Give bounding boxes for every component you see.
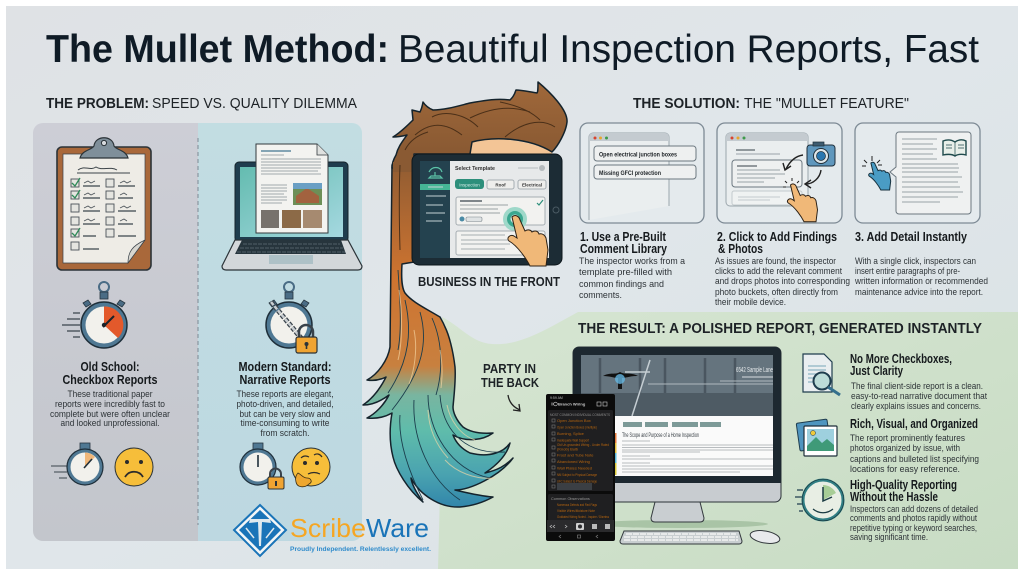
heading: the solution: THE "MULLET FEATURE" bbox=[744, 96, 909, 112]
text block: no more checkboxes: easy-to-read narrative document that bbox=[851, 391, 987, 401]
panel: step 1 card bbox=[580, 123, 704, 223]
text block: no more checkboxes bbox=[850, 352, 987, 411]
text block: modern standard: These reports are elegant, bbox=[236, 389, 334, 399]
logo: ScribeWare bbox=[234, 505, 431, 556]
text block: no more checkboxes: The final client-side report is a clean. bbox=[851, 381, 983, 391]
title bbox=[46, 28, 979, 71]
text block: step 1: template pre-filled with bbox=[579, 267, 672, 277]
illustration: phone checklist: Frost and Tube Note bbox=[557, 452, 594, 458]
text block: old school: Checkbox Reports bbox=[62, 373, 158, 387]
text block: modern standard: photo-driven, and detailed, bbox=[236, 399, 334, 409]
icon: tablet hand bbox=[508, 216, 548, 266]
text block: modern standard: Narrative Reports bbox=[240, 373, 331, 387]
label: party in the back: THE BACK bbox=[481, 376, 539, 390]
text block: high quality: Inspectors can add dozens of detailed bbox=[850, 504, 978, 514]
report header photo: 6542 Sample Lane bbox=[736, 365, 773, 374]
illustration: tablet template selector: Select Template bbox=[455, 166, 495, 172]
icon: camera bbox=[807, 142, 835, 166]
heading: the solution: THE SOLUTION: bbox=[633, 96, 740, 112]
illustration: phone checklist: Open Junction Box bbox=[557, 418, 591, 423]
heading: the problem bbox=[46, 96, 357, 112]
text block: high quality: comments and photos rapidly without bbox=[850, 513, 977, 523]
illustration: tablet template selector: Roof bbox=[495, 182, 506, 188]
illustration: tablet template selector: Electrical bbox=[522, 182, 542, 188]
text block: old school: Old School: bbox=[80, 360, 140, 374]
illustration: phone checklist: NM Subject to Physical Damage bbox=[557, 472, 598, 477]
icon: quick stopwatch bbox=[795, 479, 844, 521]
report heading: The Scope and Purpose of a Home Inspection bbox=[622, 432, 699, 439]
icon: mouse bbox=[749, 528, 781, 546]
text block: step 2: & Photos bbox=[718, 242, 763, 256]
text block: modern standard bbox=[236, 360, 334, 438]
skin forehead bbox=[470, 139, 553, 158]
text block: step 1: 1. Use a Pre-Built bbox=[580, 230, 667, 244]
illustration: phone checklist: Abandoned Wiring bbox=[557, 459, 590, 464]
text block: high quality: High-Quality Reporting bbox=[850, 478, 957, 492]
text block: high quality bbox=[850, 478, 978, 542]
report tabs bbox=[623, 422, 721, 427]
panel: the problem bbox=[33, 123, 362, 541]
top hair bbox=[392, 82, 567, 168]
text block: step 1: comments. bbox=[579, 290, 622, 300]
illustration: tablet template selector: Inspection bbox=[459, 182, 480, 188]
logo: ScribeWare: Proudly Independent. Relentlessly excellent. bbox=[290, 546, 431, 553]
logo: ScribeWare: Scribe bbox=[290, 513, 366, 543]
icon: small fast stopwatch bbox=[51, 443, 103, 485]
text block: step 3: With a single click, inspectors can bbox=[855, 256, 976, 266]
illustration: mullet hair bbox=[363, 82, 567, 507]
heading: the result: THE RESULT: A POLISHED REPORT, GENERATED INSTANTLY bbox=[578, 321, 982, 337]
illustration: phone checklist: Inadequate Wall Support bbox=[557, 438, 590, 442]
panel: step 1 card: Missing GFCI protection bbox=[599, 170, 661, 177]
icon: chained stopwatch with padlock bbox=[266, 282, 317, 353]
text block: step 2: clicks to add the relevant comment bbox=[715, 266, 843, 276]
icon: report logo bbox=[603, 372, 638, 389]
icon: photos bbox=[796, 419, 837, 456]
text block: high quality: Without the Hassle bbox=[850, 490, 938, 504]
icon: clipboard checklist bbox=[57, 138, 151, 270]
label: business in the front: BUSINESS IN THE FRONT bbox=[418, 274, 560, 289]
text block: rich visual organized: Rich, Visual, and Organized bbox=[850, 417, 978, 431]
illustration: phone checklist: Old Un-grounded Wiring - Under Rated bbox=[557, 442, 609, 447]
icon: tapping hand bbox=[869, 162, 891, 190]
title: The Mullet Method: bbox=[46, 28, 389, 71]
heading: the solution bbox=[633, 96, 909, 112]
panel: green result background bbox=[438, 312, 1018, 569]
illustration: phone checklist: Outdated Wiring Noted - Inquire / Dismiss bbox=[557, 514, 609, 519]
icon: sad face bbox=[115, 448, 153, 486]
text block: modern standard: Modern Standard: bbox=[238, 360, 332, 374]
text block: step 3 bbox=[854, 230, 988, 297]
illustration: tablet template selector bbox=[412, 154, 562, 266]
text block: old school: reports were incredibly fast to bbox=[55, 399, 165, 409]
text block: step 1: Comment Library bbox=[580, 242, 667, 256]
heading: the problem: THE PROBLEM: bbox=[46, 96, 149, 112]
icon: keyboard bbox=[620, 531, 742, 544]
illustration: phone checklist: Visible Wires/Moisture Note bbox=[557, 508, 596, 513]
lower hair bbox=[363, 165, 513, 507]
checklist rows bbox=[552, 419, 555, 518]
title: Beautiful Inspection Reports, Fast bbox=[398, 28, 979, 71]
text block: step 3: insert entire paragraphs of pre- bbox=[855, 266, 960, 276]
illustration: phone checklist: Burning, Splice bbox=[557, 431, 585, 436]
label: party in the back: PARTY IN bbox=[483, 362, 536, 376]
text block: old school: These traditional paper bbox=[68, 389, 152, 399]
icon: tablet logo bbox=[429, 168, 442, 178]
text block: modern standard: time-consuming to write bbox=[240, 418, 330, 428]
text block: step 2: and drops photos into corresponding bbox=[715, 276, 850, 286]
illustration: phone checklist: UFC Subject to Physical Damage bbox=[557, 478, 598, 484]
illustration: desktop monitor with report bbox=[573, 347, 781, 528]
colour strip bbox=[614, 433, 616, 475]
text block: old school: complete but were often unclear bbox=[50, 409, 170, 419]
icon: pointing hand bbox=[787, 184, 818, 222]
icon: thinking face bbox=[292, 448, 330, 487]
illustration: phone checklist: Branch Wiring bbox=[558, 402, 586, 406]
text block: step 2 bbox=[715, 230, 850, 307]
text block: rich visual organized: locations for easy reference. bbox=[850, 464, 960, 474]
illustration: phone checklist: Wall Plates Needed bbox=[557, 466, 592, 470]
text block: rich visual organized: The report prominently features bbox=[850, 433, 965, 443]
panel: step 2 card bbox=[717, 123, 842, 223]
text block: modern standard: from scratch. bbox=[260, 428, 310, 438]
illustration: phone checklist: MOST COMMON INDIVIDUAL COMMENTS bbox=[550, 413, 610, 417]
panel: step 3 card bbox=[855, 123, 980, 223]
text block: step 2: their mobile device. bbox=[715, 297, 786, 307]
text block: rich visual organized: photos organized by issue, with bbox=[850, 443, 960, 453]
text block: step 3: written information or recommended bbox=[854, 276, 988, 286]
icon: open book bbox=[943, 140, 966, 156]
text block: high quality: repetitive typing or keyword searches, bbox=[850, 523, 977, 533]
icon: small locked stopwatch bbox=[240, 443, 284, 489]
text block: high quality: saving significant time. bbox=[850, 532, 928, 542]
text block: no more checkboxes: clearly explains issues and concerns. bbox=[851, 401, 981, 411]
text block: old school: and looked unprofessional. bbox=[60, 418, 160, 428]
panel: step 1 card: Open electrical junction boxes bbox=[599, 152, 677, 158]
illustration: phone checklist: Common Observations bbox=[551, 497, 590, 501]
text block: modern standard: but can be very slow and bbox=[240, 409, 330, 419]
arrows to comment bbox=[783, 155, 821, 188]
text block: step 2: As issues are found, the inspector bbox=[715, 256, 836, 266]
report header photo bbox=[581, 355, 773, 416]
illustration: phone checklist: Open Junction Boxes (multiple) bbox=[557, 424, 597, 430]
label: party in the back bbox=[481, 362, 539, 390]
text block: rich visual organized: captions and bulleted list specifying bbox=[850, 454, 979, 464]
text block: step 3: 3. Add Detail Instantly bbox=[855, 230, 967, 244]
text block: no more checkboxes: No More Checkboxes, bbox=[850, 352, 952, 366]
illustration: phone checklist: 9:59 AM bbox=[550, 396, 563, 400]
text block: no more checkboxes: Just Clarity bbox=[850, 364, 903, 378]
text block: step 2: 2. Click to Add Findings bbox=[717, 230, 837, 244]
icon: document with magnifier bbox=[803, 354, 840, 395]
icon: laptop with report bbox=[222, 144, 362, 270]
illustration: phone checklist bbox=[546, 394, 615, 541]
icon: fast stopwatch bbox=[62, 282, 127, 348]
text block: old school bbox=[50, 360, 170, 428]
arrow: party in the back bbox=[508, 395, 520, 411]
text block: step 3: maintenance advice into the report. bbox=[855, 287, 983, 297]
text block: step 1 bbox=[579, 230, 686, 300]
illustration: phone checklist: (Knob) Bulb bbox=[557, 446, 579, 452]
logo: ScribeWare: Ware bbox=[366, 513, 429, 543]
text block: step 2: photo buckets, often directly from bbox=[715, 287, 838, 297]
illustration: phone checklist: Numerous Defects and Red Flags bbox=[557, 502, 597, 507]
text block: step 1: The inspector works from a bbox=[579, 256, 686, 266]
text block: step 1: common findings and bbox=[579, 279, 664, 289]
heading: the problem: SPEED VS. QUALITY DILEMMA bbox=[152, 96, 357, 112]
text block: rich visual organized bbox=[850, 417, 979, 474]
hair strands bbox=[388, 270, 505, 500]
